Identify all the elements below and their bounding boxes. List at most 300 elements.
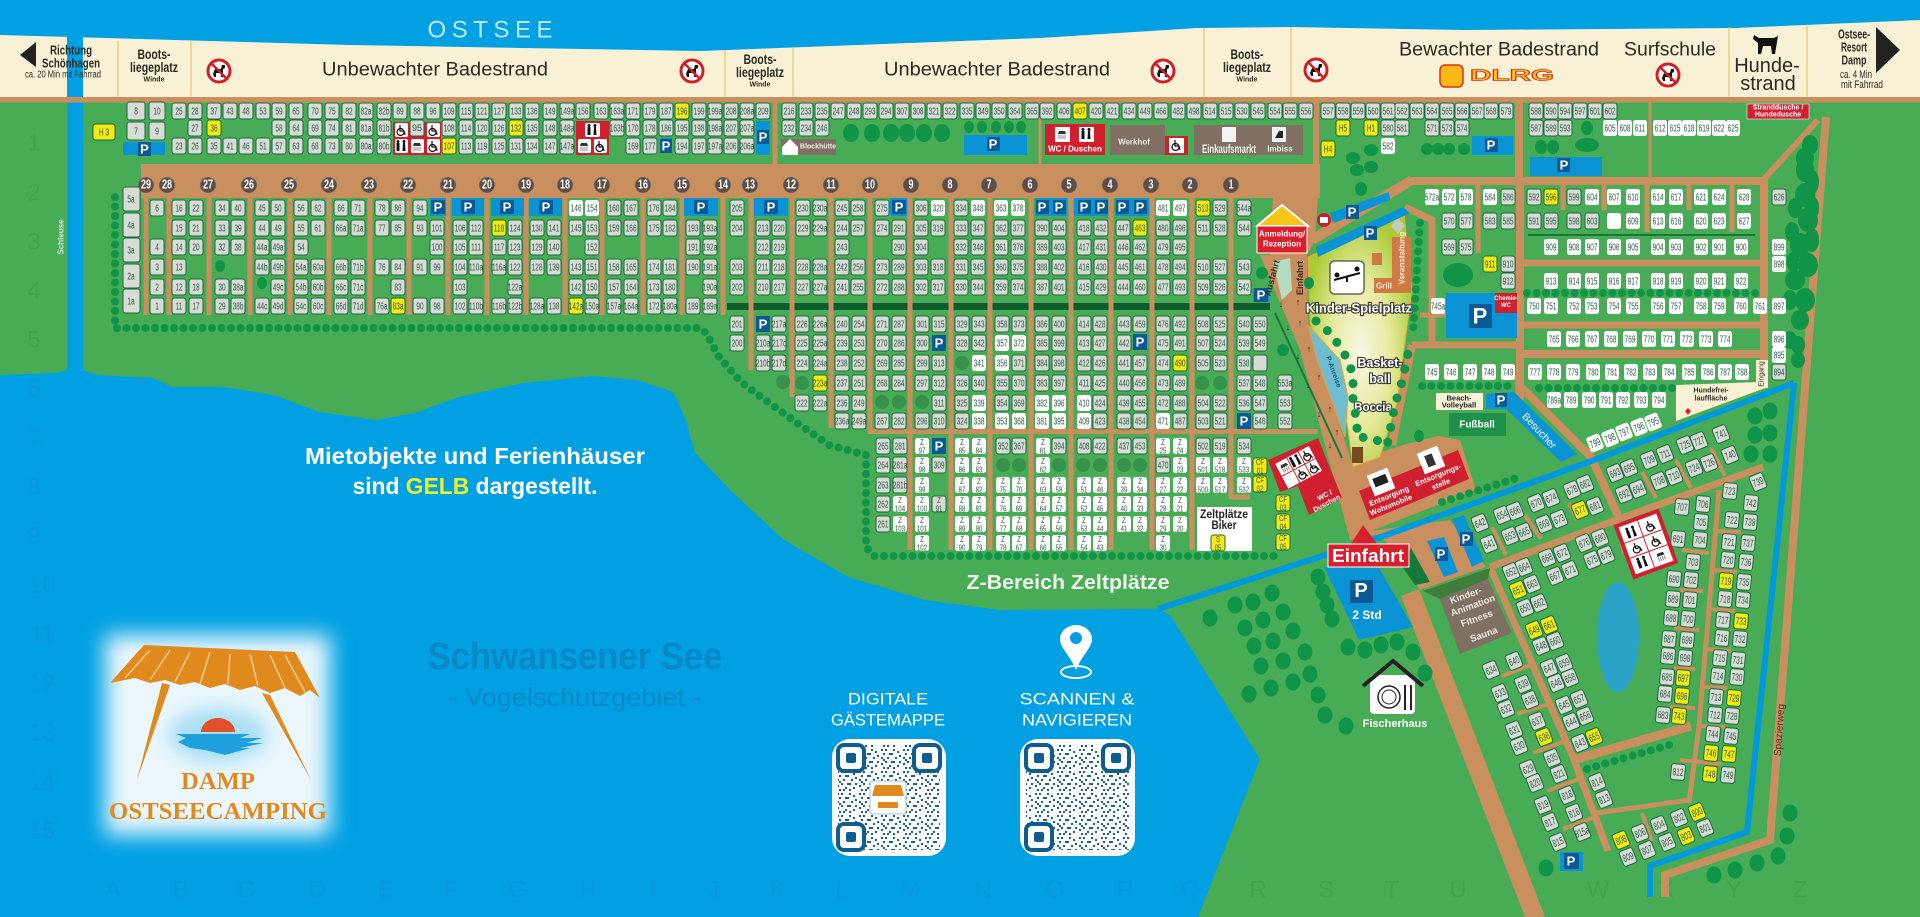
parking signs: P [1487,138,1496,152]
pitches: beach row lower: 80a [361,140,372,152]
pitches: beach row middle: 81a [361,122,372,134]
pitches: Z tent area: 81 [976,503,982,513]
sign: Richtung Schönhagen [25,42,101,80]
pitches: Z tent area: Z [1161,437,1165,447]
pitches: main block upper rows: 416 [1079,261,1090,273]
pitches: Z tent area: Z [1001,534,1005,544]
pitches: rotated south-east area: 668 [1540,550,1554,566]
divider [1275,313,1342,458]
pitches: right block row 2: 570 [1444,215,1455,227]
pitches: beach row middle: 611 [1635,122,1645,134]
pitches: main block upper rows: 104 [455,261,466,273]
pitches: main block lower rows: 439 [1119,397,1130,409]
pitches: main block lower rows: 384 [1037,357,1048,369]
pitches: main block upper rows: 116a [492,261,506,273]
label: Ausfahrt: Ausfahrt [1262,259,1282,297]
pitches: beach row lower: 125 [494,140,505,152]
pitches: Z tent area: 85 [959,445,965,455]
pitches: right block row 4: 920 [1696,275,1707,287]
pitches: main block upper rows: 544 [1239,222,1250,234]
pitches: right block rows: 621 [1696,191,1707,203]
numbered aisles: 20 [482,178,492,192]
pitches: main block upper rows: 90 [416,300,424,312]
pitches: main block upper rows: 176 [649,202,660,214]
pitches: main block upper rows: 38b [233,300,244,312]
pitches: rotated south-east area: 630 [1512,738,1526,754]
numbered aisles: 14 [718,178,728,192]
pitches: Z tent area: Z [1161,495,1165,505]
pitches: beach row middle: 108 [444,122,455,134]
pitches: rotated south-east area: 662 [1532,595,1546,611]
pitches: main block upper rows: 220 [774,222,785,234]
pitches: main block upper rows: 463 [1135,222,1146,234]
pitches: main block upper rows: 528 [1215,222,1226,234]
pitches: main block upper rows: 83a [393,300,404,312]
pitches: right block row 4: 914 [1569,275,1580,287]
facility: sanitary block north west: 95 [412,123,422,133]
pitches: right block row 5: 745a [1431,300,1445,312]
pitches: Z tent area: Z [1178,437,1182,447]
faint row numbers in lake: F [444,876,458,904]
pitches: beach row top: 59 [275,105,283,117]
pitches: right block 895 [1772,347,1786,363]
faint row numbers in lake: E [377,876,393,904]
pitches: Z tent area: Z [920,456,924,466]
pitches: right block row 4: 921 [1714,275,1725,287]
pitches: Z tent area: 44 [1097,523,1103,533]
pitches: rotated south-east area: 648 [1534,638,1548,654]
pitches: right block rows: 572 [1444,191,1455,203]
faint row numbers in lake: 7 [27,424,41,452]
pitches: Z tent area: 75 [1000,484,1006,494]
pitches: main block upper rows: 227 [798,281,809,293]
pitches: right block row 4: 919 [1671,275,1682,287]
pitches: right block 911 910 898: 910 [1503,258,1514,270]
field: Fußball: Fußball [1459,420,1495,430]
pitches: main block upper rows: 544a [1237,202,1251,214]
sign: Bootsliegeplatz 1: Winde [144,76,165,84]
pitches: main block lower rows: 489 [1175,377,1186,389]
pitches: rotated south-east area: 684 [1659,688,1671,700]
pitches: main block upper rows: 418 [1079,222,1090,234]
pitches: Z tent area: 28 [1160,503,1166,513]
pitches: beach row top: 48 [242,105,250,117]
pitches: beach row top: 156 [578,105,589,117]
pitches: Z tent area: 83 [976,464,982,474]
numbered aisles: 18 [560,178,570,192]
pitches: main block upper rows: 243 [837,241,848,253]
pitches: beach row top: 421 [1107,105,1118,117]
pitches: main block lower rows: 200 [732,337,743,349]
pitches: rotated south-east area: 698 [1679,652,1691,664]
pitches: Z tent area: Z [937,495,941,505]
pitches: right block row 7: 749 [1503,366,1514,378]
sign: Bootsliegeplatz 1 [130,46,178,84]
pitches: main block lower rows: 455 [1135,397,1146,409]
pitches: main block upper rows: 331 [956,261,967,273]
faint row numbers in lake: 13 [29,720,55,746]
pitches: right block row 6: 769 [1625,333,1636,345]
pitches: beach row top: 365 [1027,105,1038,117]
pitches: main block upper rows: 244 [837,222,848,234]
pitches: main block lower rows: 553a [1278,377,1292,389]
heading: Unbewachter Badestrand 1: Unbewachter Badestrand [322,60,548,80]
pitches: main block upper rows: 17 [192,300,200,312]
pitches: main block upper rows: 460 [1135,281,1146,293]
pitches: beach row top: 482 [1173,105,1184,117]
building: Chemie-WC [1494,293,1518,313]
pitches: main block upper rows: 44c [257,300,268,312]
pitches: rotated south-east area: 816 [1567,805,1581,821]
pitches: Z tent area: Z [960,456,964,466]
pitches: rotated south-east area: 696 [1676,690,1688,702]
parking signs: P [1366,226,1375,240]
pitches: right block row 6: 770 [1644,333,1655,345]
label: Digitale Gästemappe: DIGITALE [848,690,928,708]
pitches: Z tent area: Z [1122,476,1126,486]
pitches: Z tent area: Z [977,534,981,544]
pitches: beach row middle: 135 [527,122,538,134]
pitches: Z tent area: 394 [1054,440,1065,452]
pitches: beach row middle: 148a [560,122,574,134]
pitches: rotated south-east area: 815a [1573,824,1591,840]
pitches: beach row lower: 582 [1383,140,1394,152]
faint row numbers in lake: B [173,876,189,904]
numbered aisles: 7 [986,178,992,192]
pitches: rotated south-east area: 680 [1593,530,1607,546]
icon: accessible [1165,136,1188,155]
pitches: beach row top: 350 [994,105,1005,117]
pitches: beach row middle: 573 [1442,122,1453,134]
logo text: OSTSEECAMPING [109,799,327,825]
pitches: main block upper rows: 288 [894,281,905,293]
pitches: main block upper rows: 71d [353,300,364,312]
icon: no dogs [1305,59,1327,81]
pitches: Z tent area: 69 [1016,503,1022,513]
pitches: Z tent area: Z [1218,456,1222,466]
building: Einkaufsmarkt and Imbiss [1194,125,1303,156]
pitches: main block lower rows: 442 [1119,337,1130,349]
title: Ostsee: OSTSEE [428,16,552,44]
pitches: main block upper rows: 18 [192,281,200,293]
pitches: rotated south-east area: 689 [1667,593,1679,605]
pitches: main block upper rows: 71 [354,202,362,214]
pitches: rotated south-east area: 690 [1668,573,1680,585]
pitches: right block row 7: 780 [1588,366,1599,378]
pitches: main block upper rows: 375 [1013,261,1024,273]
pitches: rotated south-east area: 688 [1665,612,1677,624]
pitches: main block upper rows: 377 [1013,222,1024,234]
label: Boccia: Boccia [1354,402,1392,414]
pitches: main block upper rows: 158 [609,261,620,273]
numbered aisles: 9 [908,178,914,192]
Entsorgungsstelle: stelle [1430,476,1452,492]
pitches: main block lower rows: 301 [917,318,928,330]
pitches: beach row top: 82 [345,105,353,117]
pitches: rotated south-east area: 812 [1672,766,1684,778]
pitches: right block rows: 586 [1503,191,1514,203]
pitches: Z tent area: 263 [878,479,889,491]
pitches: main block upper rows: 49c [273,281,284,293]
pitches: rotated south-east area: 692 [1617,486,1631,502]
pitches: Z tent area: 500 [1198,484,1208,494]
pitches: beach row middle: 234 [801,122,812,134]
pitches: beach row top: 88 [413,105,421,117]
pitches: beach row top: 82b [379,105,390,117]
pitches: main block upper rows: 106 [455,222,466,234]
pitches: main block lower rows: 540 [1239,318,1250,330]
pitches: right block row 4: 917 [1628,275,1639,287]
pitches: Z tent area: Z [1098,495,1102,505]
pitches: rotated south-east area: 647 [1542,660,1556,676]
pitches: beach row top: 127 [494,105,505,117]
pitches: main block upper rows: 66 [337,202,345,214]
pitches: main block lower rows: 252 [854,357,865,369]
pitches: right block row 5: 755 [1628,300,1639,312]
pitches: main block upper rows: 219 [774,241,785,253]
pitches: large units 7-10 and H markers: 1a [127,295,135,307]
pitches: main block upper rows: 306 [916,202,927,214]
pitches: beach row lower: 206 [726,140,737,152]
pitches: Z tent area: Z [1161,515,1165,525]
pitches: main block upper rows: 431 [1096,241,1107,253]
logo text [109,769,327,825]
numbered aisles: 5 [1066,178,1072,192]
pitches: beach row lower: 147 [545,140,556,152]
pitches: main block upper rows: 77 [378,222,386,234]
pitches: main block lower rows: 441 [1119,357,1130,369]
building: Anmeldung/Rezeption [1257,205,1308,253]
icon: seesaw [1330,261,1364,294]
pitches: main block upper rows: 98 [433,300,441,312]
pitches: Z tent area: 89 [959,523,965,533]
pitches: beach row middle: 58 [275,122,283,134]
pitches: Z tent area: Z [1098,476,1102,486]
beach strip [0,20,1920,98]
pitches: beach row top: 407 [1075,105,1086,117]
pitches: main block upper rows: 167 [626,202,637,214]
pitches: main block upper rows: 129 [532,241,543,253]
pitches: main block lower rows: 546 [1255,415,1266,427]
pitches: main block lower rows: 338 [974,415,985,427]
pitches: right block 911 910 898: 911 [1485,258,1495,270]
pitches: right block rows: 572a [1425,191,1439,203]
pitches: right block row 5: 752 [1569,300,1580,312]
pitches: beach row top: 555 [1285,105,1296,117]
pitches: main block upper rows: 191a [703,261,717,273]
label: Basketball: ball [1369,372,1391,386]
pitches: beach row top: 149 [545,105,556,117]
pitches: main block upper rows: 122b [508,300,522,312]
pitches: Z tent area: 33 [1137,503,1143,513]
pitches: main block upper rows: 130 [532,222,543,234]
hedges [115,197,1760,769]
numbered aisles: 23 [364,178,374,192]
parking signs: P [759,130,768,144]
building: Anmeldung/Rezeption: Anmeldung/ [1259,230,1306,238]
pitches: main block lower rows: 343 [974,318,985,330]
pitches: Z tent area: 25 [1160,445,1166,455]
pitches: Z tent area: Z [1218,476,1222,486]
pitches: right block row 3: 907 [1587,241,1598,253]
pitches: Z tent area: 534 [1239,440,1250,452]
pitches: rotated south-east area: 813 [1597,791,1611,807]
pitches: rotated south-east area: 681 [1588,498,1602,514]
sign: Einfahrt [1328,525,1409,567]
pitches: right block row 7: 787 [1720,366,1731,378]
pitches: main block upper rows: 213 [758,222,769,234]
pitches: right block row 6: 896 [1774,333,1785,345]
pitches: Z tent area: 01 [1257,465,1263,475]
label: Kinder-Spielplatz: Kinder-Spielplatz [1306,300,1413,316]
pitches: beach row middle: 571 [1427,122,1438,134]
pitches: main block lower rows: 253 [854,337,865,349]
pitches: Z tent area: 518 [1215,464,1225,474]
pitches: main block upper rows: 192a [703,241,717,253]
pitches: right block row 8 [1547,392,1666,408]
facility: sanitary block north [576,121,609,155]
pitches: main block lower rows: 210a [756,337,770,349]
pitches: main block lower rows: 548 [1255,377,1266,389]
pitches: main block upper rows: 496 [1175,222,1186,234]
pitches: Z tent area: Z [977,495,981,505]
pitches: Z tent area: 62 [1040,464,1046,474]
numbered aisles: 12 [786,178,796,192]
building: WC / Duschen: WC / Duschen [1048,144,1102,154]
pitches: Z tent area: Z [1017,495,1021,505]
pitches: beach row lower: 35 [210,140,218,152]
pitches: beach row top: 82a [361,105,372,117]
pitches: main block lower rows: 459 [1135,318,1146,330]
pitches: main block upper rows: 193a [703,222,717,234]
pitches: main block upper rows: 217 [774,281,785,293]
sign: Bootsliegeplatz 2: liegeplatz [736,64,784,80]
pitches: rotated south-east area: 711 [1658,446,1672,462]
P-Anreise lane: P-Anreise [1324,355,1342,389]
pitches: rotated south-east area: 732 [1734,633,1746,645]
pitches: main block upper rows: 497 [1175,202,1186,214]
icon: location pin [1060,625,1092,678]
pitches: large units 7-10 and H markers: 2a [127,270,135,282]
pitches: main block lower rows: 504 [1198,397,1209,409]
pitches: Z tent area: 101 [917,523,927,533]
pitches: beach row top: 420 [1091,105,1102,117]
pitches: main block upper rows: 529 [1215,202,1226,214]
label: Besucher: Besucher [1519,411,1559,452]
pitches: beach row top: 216 [784,105,795,117]
pitches: Z tent area: 453 [1135,440,1146,452]
pitches: main block lower rows: 412 [1079,357,1090,369]
pitches: rotated south-east area: 695 [1622,460,1636,476]
numbered aisles: 8 [947,178,953,192]
pitches: right block row 7: 894 [1774,366,1785,378]
pitches: rotated south-east area: 665 [1517,524,1531,540]
pitches: main block upper rows: 461 [1135,261,1146,273]
parking signs: P [989,136,998,152]
pitches: Z tent area: Z [1041,456,1045,466]
pitches: rotated south-east area: 736 [1740,556,1752,568]
pitches: Z tent area [876,437,1290,552]
canal: Schleuse [56,36,83,371]
building: Einkaufsmarkt and Imbiss: Einkaufsmarkt [1202,142,1256,156]
pitches: beach row top: 209 [758,105,769,117]
pitches: Z tent area: Z [977,437,981,447]
P-Anreise lane [1308,325,1348,437]
pitches: rotated south-east area [1471,412,1767,867]
pitches: beach row top: 597 [1575,105,1586,117]
pitches: main block upper rows: 11 [176,300,183,312]
pitches: main block lower rows: 300 [917,337,928,349]
pitches: Z tent area: 22 [1177,484,1183,494]
pitches: main block upper rows: 34 [218,202,226,214]
pitches: main block lower rows: 271 [877,318,888,330]
faint column letters on land: U [1449,876,1467,904]
pitches: right block row 3: 909 [1546,241,1557,253]
pitches: main block lower rows: 328 [957,337,968,349]
parking signs: P [662,138,671,154]
pitches: right block row 3: 569 [1444,241,1455,253]
WC / Duschen rotated block [1268,438,1342,515]
pitches: main block lower rows: 356 [997,357,1008,369]
pitches: main block upper rows: 40 [234,202,242,214]
pitches: main block upper rows: 513 [1198,202,1209,214]
pitches: Z tent area: 51 [1081,484,1087,494]
pitches: right block row 5: 751 [1546,300,1557,312]
pitches: main block lower rows: 251 [854,377,865,389]
pitches: main block lower rows: 224 [797,357,808,369]
pitches: large units 7-10 and H markers: 4a [127,219,135,231]
pitches: main block upper rows: 164a [624,300,638,312]
Veranstaltung and Grill: Veranstaltung [1398,231,1406,284]
pitches: main block lower rows: 217c [772,337,787,349]
pitches: main block lower rows: 286 [894,337,905,349]
faint row numbers in lake: O [1046,876,1064,904]
pitches: main block upper rows: 66b [336,261,347,273]
pitches: rotated south-east area: 809 [1621,849,1635,865]
area: Hundefreilauffläche: lauffläche [1695,396,1727,402]
parking signs: P [1497,392,1506,408]
pitches: Z tent area: 532 [1239,484,1249,494]
pitches: main block upper rows: 228 [798,261,809,273]
pitches: beach row top: 558 [1338,105,1349,117]
pitches: beach row top: 321 [929,105,940,117]
pitches: main block lower rows: 358 [997,318,1008,330]
pitches: main block upper rows: 274 [877,222,888,234]
pitches: main block upper rows: 123 [510,241,521,253]
building: Werkhof: Werkhof [1118,138,1150,146]
pitches: main block lower rows: 400 [1054,318,1065,330]
pitches: rotated south-east area: 721 [1723,536,1735,548]
pitches: main block upper rows: 345 [973,261,984,273]
pitches: main block lower rows: 354 [997,397,1008,409]
faint column letters on land [1249,876,1807,904]
pitches: beach row middle: 132 [511,122,522,134]
pitches: large units 7-10 and H markers: 3a [127,244,135,256]
pitches: rotated south-east area: 815 [1551,834,1565,850]
pitches: main block upper rows: 462 [1135,241,1146,253]
pitches: main block lower rows: 549 [1255,337,1266,349]
pitches: main block upper rows: 153 [587,222,598,234]
pitches: Z tent area: 99 [919,484,925,494]
parking signs: P [434,200,443,214]
water [176,734,263,755]
pitches: Z tent area: 27 [1160,484,1166,494]
pitches: rotated south-east area: 804 [1652,817,1666,833]
pitches: main block lower rows: 249 [854,397,865,409]
pitches: main block upper rows: 71b [353,261,364,273]
pitches: main block lower rows: 476 [1158,318,1169,330]
pitches: rotated south-east area: 722 [1726,514,1738,526]
